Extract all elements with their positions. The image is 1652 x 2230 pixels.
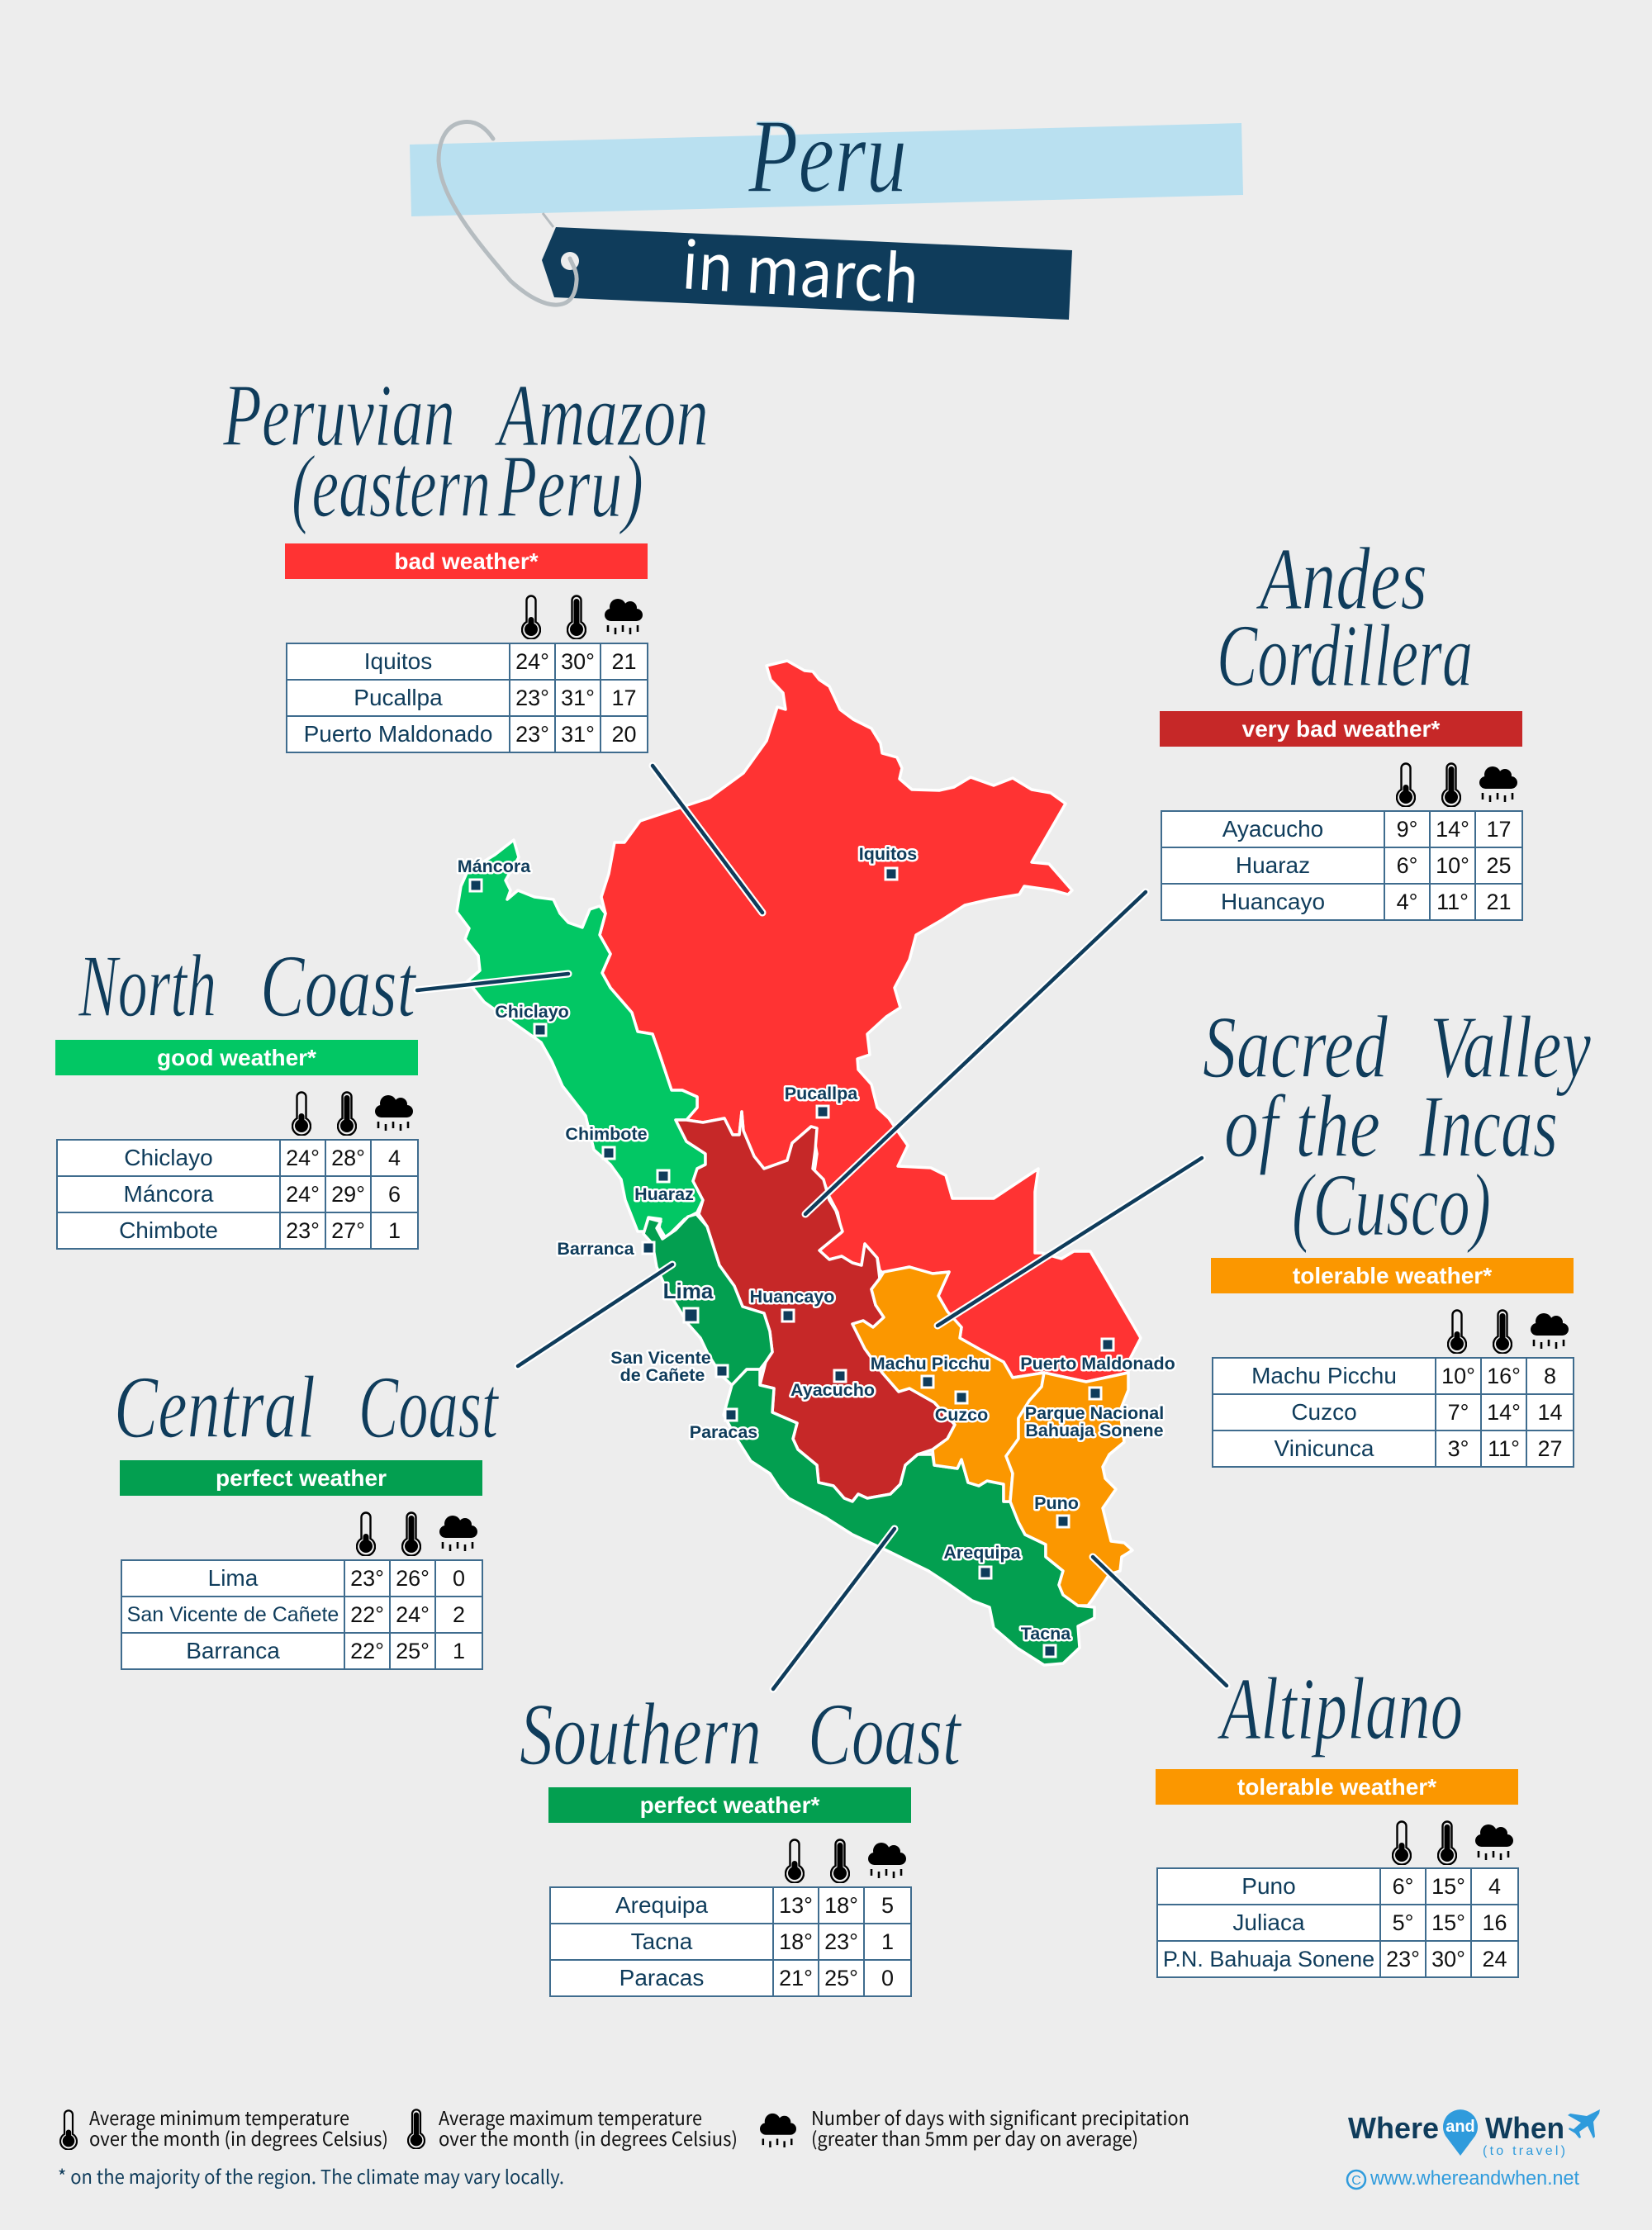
- table: Southern Coast cities: Arequipa: [615, 1892, 708, 1918]
- table: Sacred Valley cities: Cuzco: [1291, 1399, 1357, 1425]
- table: Southern Coast cities: 1: [881, 1929, 894, 1954]
- heading: Sacred Valley of the Incas (Cusco): Sacred: [1203, 999, 1389, 1097]
- table: Central Coast cities: 25°: [396, 1639, 430, 1663]
- table: Central Coast cities: 22°: [350, 1639, 384, 1663]
- table: Altiplano cities: 4: [1488, 1874, 1501, 1899]
- heading: Peruvian Amazon: [222, 367, 709, 536]
- legend: maximum temperature: over the month (in degrees Celsius): [439, 2123, 738, 2152]
- title ribbon: Peru: [410, 97, 1243, 216]
- badge: good weather: [55, 1040, 418, 1075]
- table: Sacred Valley cities: [1212, 1357, 1574, 1468]
- icons: min, max, rain: [1447, 1309, 1569, 1354]
- table: Amazon cities: 21: [611, 649, 637, 674]
- heading: Central Coast: Coast: [358, 1359, 500, 1457]
- city labels: San Vicente: [610, 1348, 711, 1368]
- heading: Peruvian Amazon: Peru): [497, 438, 643, 536]
- table: Altiplano cities: 15°: [1431, 1874, 1465, 1899]
- city labels: Máncora: [458, 856, 531, 876]
- heading: North Coast: North: [78, 937, 216, 1036]
- table: Southern Coast cities: 23°: [824, 1929, 858, 1954]
- logo: Where and When: (to travel): [1483, 2144, 1565, 2158]
- tag string: [439, 122, 577, 305]
- table: North Coast cities: 4: [388, 1146, 401, 1170]
- table: Sacred Valley cities: 3°: [1448, 1436, 1469, 1461]
- table: Altiplano cities: P.N. Bahuaja Sonene: [1163, 1947, 1374, 1971]
- region: Andes Cordillera: [676, 1112, 955, 1502]
- table: Central Coast cities: 1: [453, 1639, 465, 1663]
- logo: Where and When: When: [1485, 2111, 1564, 2145]
- table: Andes cities: 4°: [1397, 890, 1417, 914]
- heading: Altiplano: Altiplano: [1218, 1660, 1463, 1758]
- table: Amazon cities: Iquitos: [364, 648, 432, 674]
- legend: maximum temperature: Average maximum temperature: [439, 2103, 702, 2131]
- legend: minimum temperature: [60, 2103, 388, 2152]
- table: Andes cities: 21: [1486, 890, 1512, 914]
- region: Sacred Valley: [852, 1267, 1044, 1502]
- panel: Altiplano: [1156, 1769, 1519, 1978]
- table: Sacred Valley cities: 8: [1544, 1364, 1556, 1388]
- city labels: Huancayo: [750, 1287, 834, 1307]
- table: Sacred Valley cities: Vinicunca: [1275, 1435, 1374, 1461]
- table: Sacred Valley cities: 27: [1537, 1436, 1563, 1461]
- table: North Coast cities: [56, 1139, 419, 1250]
- table: Amazon cities: 17: [611, 686, 637, 710]
- badge: perfect weather: [120, 1460, 482, 1496]
- badge: bad weather: [285, 543, 648, 579]
- table: Amazon cities: Pucallpa: [354, 685, 443, 710]
- city labels: Tacna: [1021, 1624, 1071, 1644]
- logo: Where and When: Where: [1348, 2111, 1439, 2145]
- table: Southern Coast cities: 13°: [779, 1893, 813, 1918]
- connector: Central Coast: [518, 1264, 672, 1366]
- table: North Coast cities: 1: [388, 1218, 401, 1243]
- table: Andes cities: Huaraz: [1236, 852, 1310, 878]
- luggage tag: in march: [542, 213, 1072, 322]
- heading: Peruvian Amazon: Peruvian: [222, 367, 455, 465]
- table: Altiplano cities: Juliaca: [1232, 1910, 1305, 1935]
- region: Peruvian Amazon: [600, 661, 1141, 1382]
- table: Andes cities: 17: [1486, 817, 1512, 842]
- table: Andes cities: 14°: [1436, 817, 1469, 842]
- connector: North Coast: [417, 974, 568, 990]
- legend: minimum temperature: Average minimum temperature: [89, 2103, 349, 2131]
- table: Sacred Valley cities: Machu Picchu: [1251, 1363, 1397, 1388]
- table: North Coast cities: 27°: [331, 1218, 365, 1243]
- city labels: Huaraz: [634, 1184, 694, 1204]
- heading: Peruvian Amazon: (eastern: [292, 438, 491, 536]
- table: Altiplano cities: 30°: [1431, 1947, 1465, 1971]
- region: Southern Coast: [724, 1369, 1094, 1665]
- city markers: [470, 868, 1113, 1657]
- badge: perfect weather: perfect weather: [216, 1465, 387, 1491]
- legend: precipitation: (greater than 5mm per day on average): [811, 2123, 1138, 2152]
- heading: Sacred Valley of the Incas (Cusco): [1203, 999, 1591, 1255]
- city labels: Arequipa: [943, 1543, 1022, 1563]
- badge: perfect weather: perfect weather*: [640, 1792, 819, 1818]
- heading: Sacred Valley of the Incas (Cusco): Valley: [1430, 999, 1591, 1097]
- table: Sacred Valley cities: 7°: [1448, 1400, 1469, 1425]
- table: Amazon cities: 24°: [515, 649, 549, 674]
- table: Altiplano cities: 23°: [1386, 1947, 1420, 1971]
- table: Central Coast cities: 26°: [396, 1566, 430, 1591]
- heading: Sacred Valley of the Incas (Cusco): Incas: [1418, 1078, 1558, 1176]
- city labels: Chiclayo: [495, 1002, 569, 1022]
- logo: Where and When: www.whereandwhen.net: [1370, 2167, 1579, 2190]
- table: Southern Coast cities: 18°: [824, 1893, 858, 1918]
- heading: Andes Cordillera: Andes: [1256, 530, 1427, 629]
- table: Andes cities: 11°: [1436, 890, 1469, 914]
- heading: Sacred Valley of the Incas (Cusco): (Cusco): [1292, 1156, 1491, 1255]
- footnote: * on the majority of the region. The climate may vary locally.: [58, 2161, 564, 2190]
- table: Amazon cities: 30°: [561, 649, 595, 674]
- table: Andes cities: 9°: [1397, 817, 1417, 842]
- table: Altiplano cities: 16: [1482, 1910, 1507, 1935]
- table: Southern Coast cities: 21°: [779, 1966, 813, 1990]
- table: Southern Coast cities: 25°: [824, 1966, 858, 1990]
- icons: min, max, rain: [1392, 1820, 1513, 1865]
- city labels: Parque Nacional: [1025, 1403, 1164, 1423]
- badge: perfect weather: [548, 1787, 911, 1823]
- icons: min, max, rain: [1396, 762, 1517, 807]
- legend: minimum temperature: over the month (in degrees Celsius): [89, 2123, 388, 2152]
- logo: Where and When: [1347, 2109, 1600, 2190]
- legend: precipitation: [760, 2103, 1189, 2152]
- map of Peru: [457, 661, 1141, 1665]
- panel: Central Coast: [120, 1460, 483, 1670]
- heading: Andes Cordillera: Cordillera: [1217, 607, 1473, 705]
- connector: Andes Cordillera: [805, 892, 1146, 1214]
- table: Southern Coast cities: [549, 1886, 912, 1997]
- badge: very bad weather: very bad weather*: [1242, 716, 1440, 742]
- panel: Southern Coast: [548, 1787, 912, 1997]
- heading: Southern Coast: Coast: [808, 1686, 962, 1784]
- city labels: Bahuaja Sonene: [1025, 1421, 1164, 1440]
- table: North Coast cities: 29°: [331, 1182, 365, 1207]
- table: Southern Coast cities: 18°: [779, 1929, 813, 1954]
- luggage tag: in march: in march: [680, 215, 922, 322]
- heading: Southern Coast: Southern: [520, 1686, 762, 1784]
- table: Central Coast cities: 0: [453, 1566, 465, 1591]
- table: North Coast cities: 6: [388, 1182, 401, 1207]
- table: Central Coast cities: Lima: [208, 1565, 258, 1591]
- table: Andes cities: Ayacucho: [1222, 816, 1323, 842]
- panel: North Coast: [55, 1040, 419, 1250]
- table: Amazon cities: 31°: [561, 722, 595, 747]
- table: North Coast cities: Chiclayo: [124, 1145, 213, 1170]
- icons: min, max, rain: [356, 1511, 477, 1556]
- logo: Where and When: C: [1351, 2174, 1361, 2188]
- table: Andes cities: Huancayo: [1221, 889, 1325, 914]
- icons: min, max, rain: [521, 595, 643, 639]
- table: Southern Coast cities: Tacna: [631, 1929, 692, 1954]
- table: Central Coast cities: 2: [453, 1602, 465, 1627]
- table: Amazon cities: Puerto Maldonado: [304, 721, 492, 747]
- heading: Central Coast: Central: [114, 1359, 316, 1457]
- heading: Andes Cordillera: [1217, 530, 1473, 705]
- city labels: Machu Picchu: [871, 1354, 990, 1374]
- city labels: Iquitos: [859, 844, 917, 864]
- connector: Sacred Valley: [938, 1158, 1202, 1326]
- table: Amazon cities: 23°: [515, 686, 549, 710]
- table: Altiplano cities: 15°: [1431, 1910, 1465, 1935]
- table: North Coast cities: 23°: [286, 1218, 320, 1243]
- city labels: Pucallpa: [785, 1084, 858, 1103]
- table: Southern Coast cities: Paracas: [620, 1965, 704, 1990]
- table: Central Coast cities: 23°: [350, 1566, 384, 1591]
- legend: precipitation: Number of days with significant precipitation: [811, 2103, 1189, 2131]
- city labels: Lima: [663, 1279, 714, 1303]
- icons: min, max, rain: [785, 1839, 906, 1883]
- table: Central Coast cities: Barranca: [186, 1638, 280, 1663]
- badge: bad weather: bad weather*: [394, 548, 539, 574]
- table: Central Coast cities: San Vicente de Cañete: [127, 1603, 339, 1626]
- city labels: [458, 844, 1175, 1644]
- table: Central Coast cities: [121, 1559, 483, 1670]
- table: Altiplano cities: 5°: [1393, 1910, 1413, 1935]
- table: Amazon cities: 23°: [515, 722, 549, 747]
- table: Altiplano cities: 6°: [1393, 1874, 1413, 1899]
- city labels: Barranca: [557, 1239, 635, 1259]
- title ribbon: Peru: Peru: [748, 97, 907, 215]
- region: Altiplano: [1006, 1373, 1132, 1606]
- table: Amazon cities: [286, 643, 648, 753]
- table: North Coast cities: 28°: [331, 1146, 365, 1170]
- table: Sacred Valley cities: 14: [1537, 1400, 1563, 1425]
- heading: Peruvian Amazon: Amazon: [495, 367, 709, 465]
- table: Andes cities: [1161, 810, 1523, 921]
- logo: Where and When: and: [1446, 2118, 1475, 2136]
- panel: Andes Cordillera: [1160, 711, 1523, 921]
- table: Amazon cities: 31°: [561, 686, 595, 710]
- table: Sacred Valley cities: 16°: [1487, 1364, 1521, 1388]
- table: North Coast cities: 24°: [286, 1182, 320, 1207]
- city labels: Ayacucho: [790, 1380, 875, 1400]
- table: Altiplano cities: [1156, 1867, 1519, 1978]
- city labels: Puerto Maldonado: [1020, 1354, 1175, 1374]
- table: Southern Coast cities: 5: [881, 1893, 894, 1918]
- table: Central Coast cities: 24°: [396, 1602, 430, 1627]
- icons: min, max, rain: [292, 1091, 413, 1136]
- heading: North Coast: [78, 937, 417, 1036]
- connector: Peruvian Amazon: [653, 766, 762, 913]
- table: Andes cities: 6°: [1397, 853, 1417, 878]
- table: North Coast cities: 24°: [286, 1146, 320, 1170]
- table: Central Coast cities: 22°: [350, 1602, 384, 1627]
- region: North Coast: [457, 840, 705, 1238]
- heading: Sacred Valley of the Incas (Cusco): of the: [1224, 1078, 1380, 1176]
- connector: Southern Coast: [773, 1529, 895, 1689]
- table: Altiplano cities: 24: [1482, 1947, 1507, 1971]
- table: Sacred Valley cities: 14°: [1487, 1400, 1521, 1425]
- city labels: Puno: [1034, 1493, 1079, 1513]
- panel: Peruvian Amazon: [285, 543, 648, 753]
- badge: very bad weather: [1160, 711, 1522, 747]
- badge: tolerable weather: [1156, 1769, 1518, 1805]
- table: Amazon cities: 20: [611, 722, 637, 747]
- city labels: Cuzco: [935, 1405, 988, 1425]
- table: Southern Coast cities: 0: [881, 1966, 894, 1990]
- panel: Sacred Valley: [1211, 1258, 1574, 1468]
- legend: maximum temperature: [408, 2103, 738, 2152]
- city labels: de Cañete: [620, 1365, 705, 1385]
- table: Sacred Valley cities: 10°: [1441, 1364, 1475, 1388]
- table: Andes cities: 10°: [1436, 853, 1469, 878]
- badge: tolerable weather: tolerable weather*: [1293, 1263, 1492, 1288]
- heading: North Coast: Coast: [260, 937, 417, 1036]
- city labels: Chimbote: [565, 1124, 648, 1144]
- table: North Coast cities: Chimbote: [119, 1217, 218, 1243]
- city labels: Paracas: [690, 1422, 757, 1442]
- table: Sacred Valley cities: 11°: [1488, 1436, 1520, 1461]
- badge: tolerable weather: tolerable weather*: [1237, 1774, 1436, 1800]
- region: Central Coast: [643, 1214, 772, 1385]
- table: Altiplano cities: Puno: [1241, 1873, 1296, 1899]
- connector: Altiplano: [1093, 1557, 1227, 1686]
- table: Andes cities: 25: [1486, 853, 1512, 878]
- badge: good weather: good weather*: [157, 1045, 316, 1070]
- table: North Coast cities: Máncora: [124, 1181, 213, 1207]
- badge: tolerable weather: [1211, 1258, 1574, 1293]
